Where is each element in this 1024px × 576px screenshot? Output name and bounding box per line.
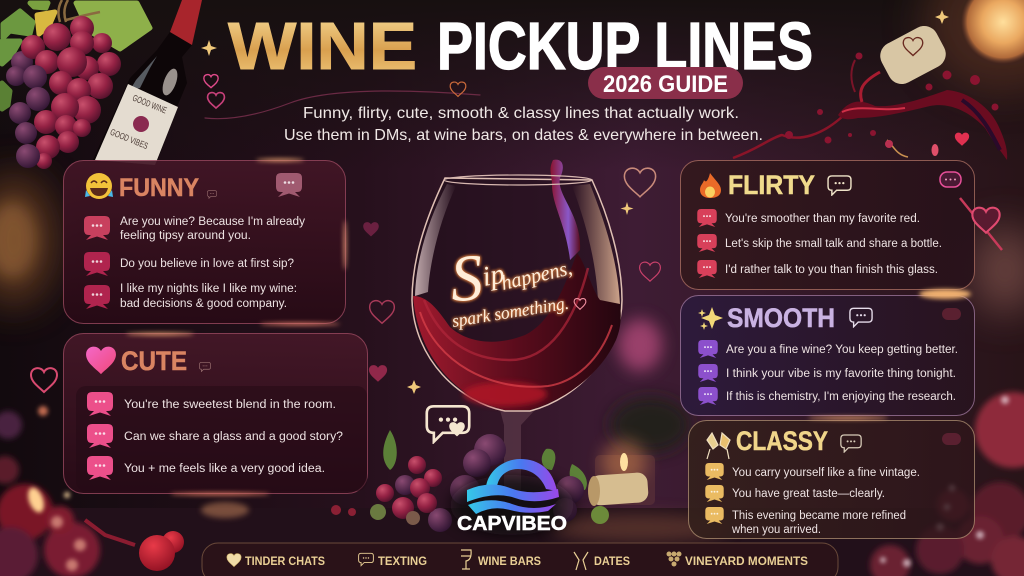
bottle label text: GOOD VIBES xyxy=(109,127,150,151)
item: vineyard moments: VINEYARD MOMENTS xyxy=(685,554,808,568)
pickup lines: I like my nights like I like my wine: xyxy=(120,283,297,295)
wine glass xyxy=(412,160,622,495)
item: dates: DATES xyxy=(594,554,630,568)
glass highlights xyxy=(415,184,456,296)
panel edge glows xyxy=(126,158,971,496)
speech bubble icon with heart xyxy=(427,406,469,442)
pickup lines: You're smoother than my favorite red. xyxy=(725,213,920,225)
panel: funny xyxy=(64,160,346,324)
title: WINE xyxy=(228,9,417,84)
pickup lines: Are you a fine wine? You keep getting better. xyxy=(726,344,958,356)
icon: flame xyxy=(700,173,721,198)
item: texting xyxy=(359,553,427,568)
pickup lines: Are you wine? Because I'm already xyxy=(120,216,305,228)
panel: classy xyxy=(688,420,974,538)
panel: cute xyxy=(64,334,368,494)
wine pour splash xyxy=(550,160,580,260)
pickup lines: You + me feels like a very good idea. xyxy=(124,463,325,475)
small chat icon xyxy=(200,362,210,372)
line icons xyxy=(698,340,718,405)
bottom usage bar xyxy=(202,543,838,576)
pickup lines: feeling tipsy around you. xyxy=(120,230,251,242)
chat icon xyxy=(828,176,851,195)
logo: capvibeo xyxy=(450,459,574,535)
glass bowl xyxy=(412,178,622,411)
pickup lines xyxy=(120,216,305,310)
pickup lines: You're the sweetest blend in the room. xyxy=(124,399,336,411)
heading: FUNNY xyxy=(119,174,199,202)
subtitle: Funny, flirty, cute, smooth & classy lines that actually work. xyxy=(303,105,739,122)
pickup lines xyxy=(124,399,343,475)
top-left grape bunch, leaves xyxy=(2,0,150,169)
pickup lines: I'd rather talk to you than finish this glass. xyxy=(725,264,938,276)
pickup lines: bad decisions & good company. xyxy=(120,298,287,310)
pickup lines xyxy=(726,344,958,403)
pickup lines: If this is chemistry, I'm enjoying the research. xyxy=(726,391,956,403)
title: PICKUP LINES xyxy=(437,9,813,84)
glass stem and base xyxy=(500,410,535,495)
icon: sparkles xyxy=(698,307,723,330)
neon lettering xyxy=(448,241,574,331)
subtitle xyxy=(284,105,763,144)
title xyxy=(228,9,813,84)
chat icons xyxy=(841,433,961,452)
rim highlight xyxy=(444,175,592,185)
subtitle: Use them in DMs, at wine bars, on dates & everywhere in between. xyxy=(284,127,763,144)
icon: pink heart xyxy=(86,347,116,374)
bottom grapes, cork and candle xyxy=(331,406,655,532)
line icons xyxy=(84,216,110,309)
line icons xyxy=(705,463,724,524)
icon: laughing face xyxy=(85,173,113,199)
pickup lines: Do you believe in love at first sip? xyxy=(120,258,294,270)
heading: FLIRTY xyxy=(728,170,815,200)
pickup lines: You have great taste—clearly. xyxy=(732,488,885,500)
heading: SMOOTH xyxy=(727,303,835,333)
corner chat icon xyxy=(940,172,961,187)
pickup lines: You carry yourself like a fine vintage. xyxy=(732,467,920,479)
logo wordmark: CAPVIBEO xyxy=(457,513,567,535)
blurred foreground grapes xyxy=(0,392,1024,576)
icon: champagne glasses xyxy=(707,433,730,459)
chat icons xyxy=(850,308,961,327)
item: tinder chats: TINDER CHATS xyxy=(245,554,325,568)
panel: smooth xyxy=(680,296,974,416)
item: texting: TEXTING xyxy=(378,554,427,568)
item: dates xyxy=(574,552,630,570)
item: wine bars: WINE BARS xyxy=(478,554,541,568)
panel: flirty xyxy=(680,160,974,290)
neon lettering: happens, xyxy=(499,255,574,295)
decorative hearts and sparkles xyxy=(31,10,949,394)
neon lettering: S xyxy=(448,241,485,316)
pickup lines: Let's skip the small talk and share a bottle. xyxy=(725,238,942,250)
heading: CLASSY xyxy=(736,426,828,456)
pickup lines xyxy=(731,467,920,536)
heart on string over flirty panel xyxy=(960,198,1002,250)
line icons xyxy=(87,392,113,480)
heading: CUTE xyxy=(121,346,187,376)
pickup lines: I think your vibe is my favorite thing tonight. xyxy=(726,368,956,380)
bottle label text xyxy=(109,90,168,153)
bottle label text: GOOD WINE xyxy=(131,93,168,115)
pickup lines: when you arrived. xyxy=(731,524,821,536)
wine bottle xyxy=(92,0,202,165)
neon lettering: ip xyxy=(480,259,507,293)
small chat icons xyxy=(207,173,302,198)
item: wine bars xyxy=(461,550,541,569)
pickup lines: Can we share a glass and a good story? xyxy=(124,431,343,443)
line icons xyxy=(697,209,717,278)
pickup lines xyxy=(725,213,942,276)
wine body xyxy=(413,253,621,410)
neon lettering: spark something. xyxy=(450,293,570,331)
pickup lines: This evening became more refined xyxy=(732,510,906,522)
wine splash and cork, top right xyxy=(733,21,1007,160)
badge: 2026 guide: 2026 GUIDE xyxy=(603,71,728,98)
